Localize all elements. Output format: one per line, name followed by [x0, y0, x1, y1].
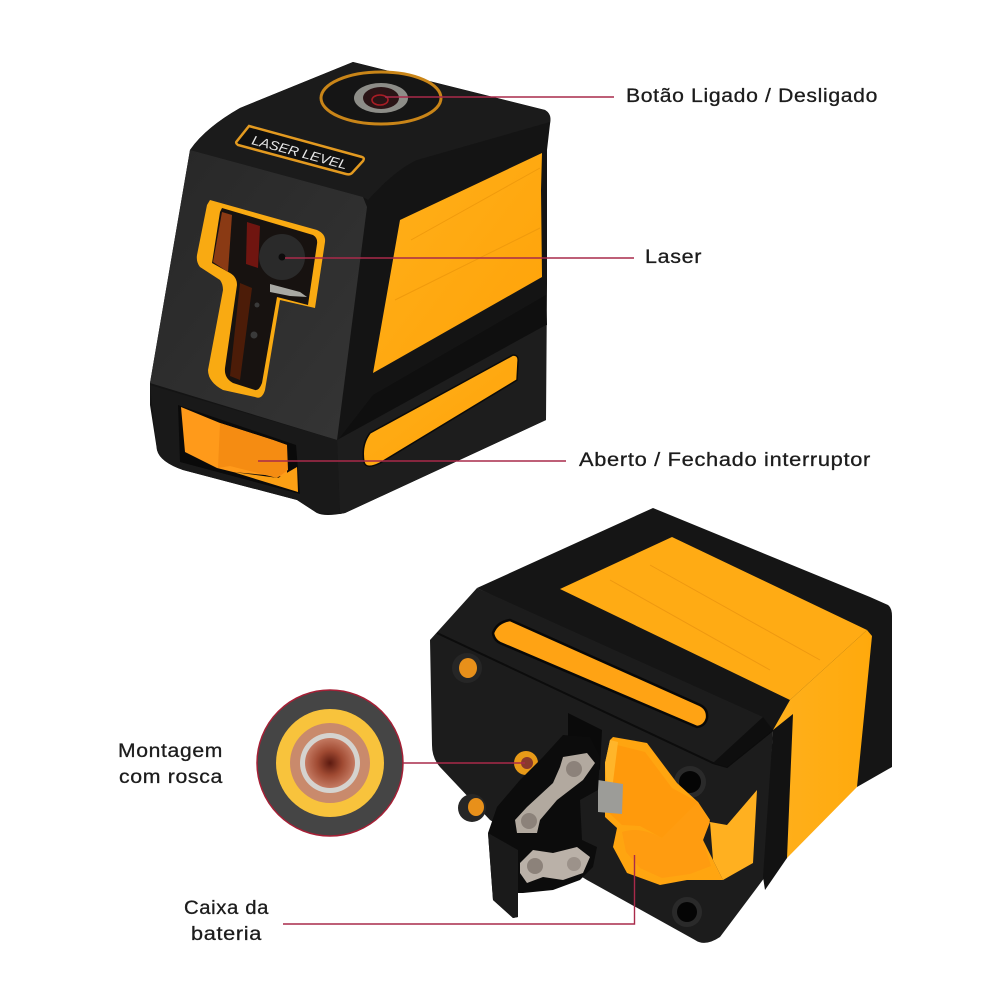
leader lines — [258, 97, 634, 924]
label: battery compartment: bateria — [191, 923, 262, 945]
label: battery compartment: Caixa da — [184, 897, 269, 919]
label: threaded mount: com rosca — [119, 766, 223, 788]
screw holes — [452, 653, 706, 927]
lower dark band — [338, 295, 547, 440]
base side block — [337, 325, 546, 514]
label: threaded mount: Montagem — [118, 740, 223, 762]
body silhouette — [150, 62, 550, 515]
orange slot — [493, 620, 707, 727]
base front block — [150, 385, 340, 514]
on/off switch — [181, 407, 298, 492]
orange wrap side — [772, 630, 872, 870]
side window — [710, 790, 757, 880]
label: power button: Botão Ligado / Desligado — [626, 85, 878, 107]
device: laser level front view — [150, 62, 550, 515]
orange top panel — [560, 537, 867, 700]
front face — [150, 150, 367, 440]
rear body black — [477, 508, 892, 787]
right end strip — [763, 714, 793, 890]
battery compartment — [605, 737, 723, 885]
lower battery contact — [520, 847, 590, 883]
front panel seam — [437, 633, 773, 767]
label plate: laser level — [236, 126, 364, 174]
T window — [197, 200, 325, 398]
label: laser: Laser — [645, 246, 702, 268]
metal clip — [598, 780, 623, 814]
label: open closed switch: Aberto / Fechado interruptor — [579, 449, 871, 471]
label: battery compartment — [184, 897, 269, 945]
upper battery contact — [515, 753, 595, 833]
inset: threaded mount close-up — [257, 690, 403, 836]
power button — [321, 72, 441, 124]
label plate: laser level: LASER LEVEL — [250, 132, 349, 172]
open battery door — [488, 735, 600, 918]
laser lens — [259, 234, 305, 280]
device: laser level underside view — [430, 508, 892, 943]
chamfer corners — [713, 717, 773, 767]
switch recess — [178, 405, 300, 494]
top surface — [190, 62, 550, 200]
lower orange bar — [363, 355, 518, 466]
door recess — [568, 713, 602, 770]
front block — [430, 588, 773, 943]
label: threaded mount — [118, 740, 223, 788]
orange side panel — [373, 153, 542, 373]
threaded mount — [514, 751, 538, 775]
